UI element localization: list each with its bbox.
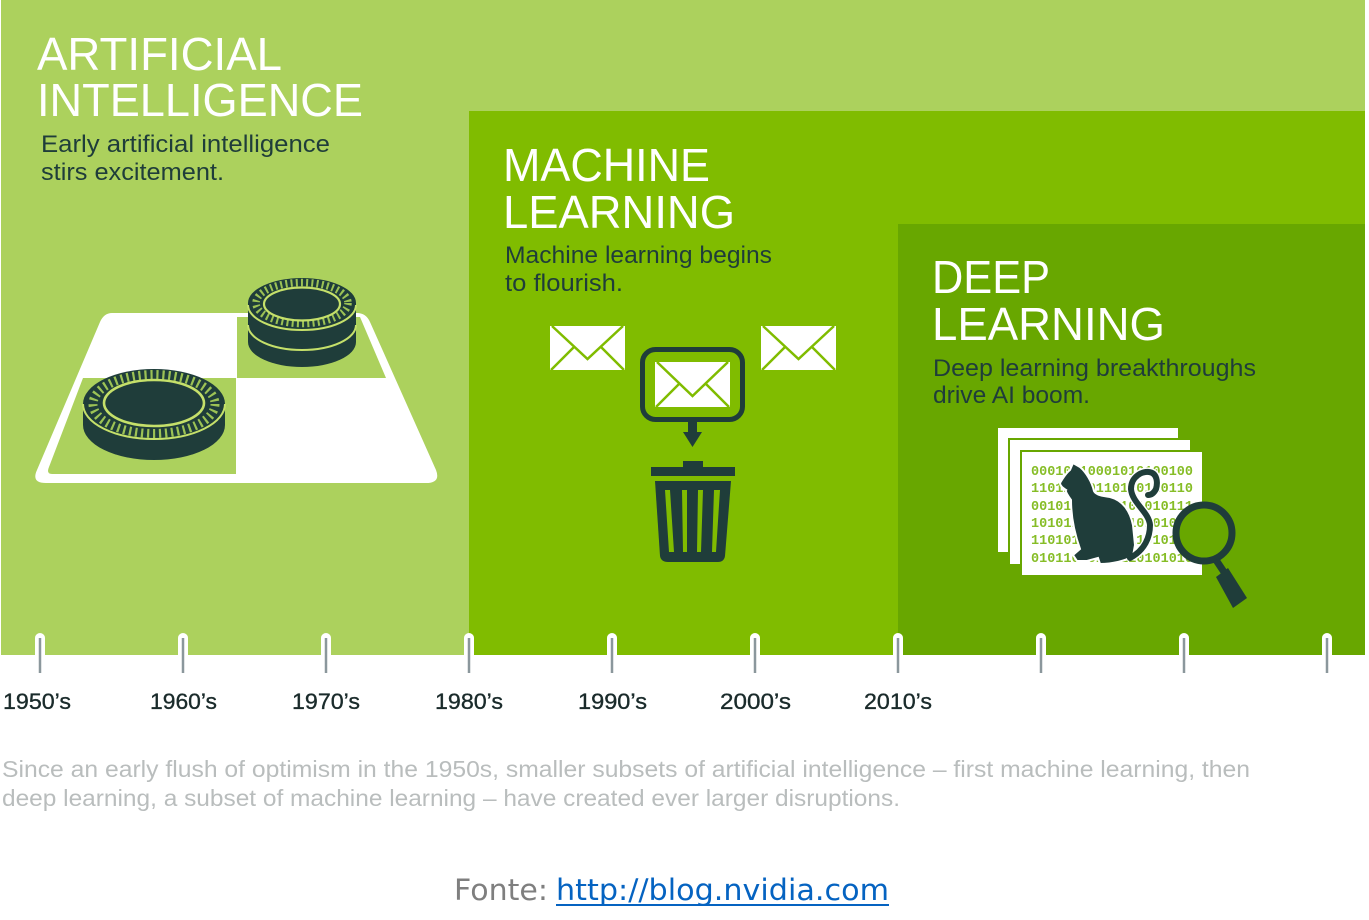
- timeline decade labels: 1980’s: [435, 689, 503, 714]
- icon: cat silhouette: [1060, 463, 1157, 564]
- timeline decade labels: 1970’s: [292, 689, 360, 714]
- text: early artificial intelligence: Early artificial intelligence: [41, 131, 330, 158]
- text: machine learning begins: [505, 242, 772, 297]
- heading: machine learning: LEARNING: [503, 186, 735, 238]
- binary digits: 11011010110100110110: [1031, 481, 1193, 497]
- binary digits: 01011010110110101010: [1031, 551, 1193, 567]
- text: early artificial intelligence: stirs excitement.: [41, 159, 224, 186]
- heading: artificial intelligence: INTELLIGENCE: [37, 74, 363, 126]
- binary digits: 00010110001010100100: [1031, 464, 1193, 480]
- heading: deep learning: DEEP: [932, 251, 1050, 303]
- timeline decade labels: 2010’s: [864, 689, 932, 714]
- icon: trash can: [651, 461, 735, 562]
- icon: left envelope: [550, 326, 625, 370]
- icon: large checker piece: [83, 369, 225, 460]
- icon: filtered envelope in frame: [642, 350, 742, 420]
- caption: deep learning, a subset of machine learning – have created ever larger disruptions.: [2, 785, 900, 811]
- source credit: Fonte:: [454, 873, 548, 907]
- text: machine learning begins: Machine learning begins: [505, 242, 772, 269]
- timeline decade labels: 1990’s: [578, 689, 647, 714]
- heading: deep learning: [932, 251, 1165, 350]
- binary digits: [1031, 464, 1193, 567]
- icon: stacked checker pieces: [248, 278, 356, 367]
- text: deep learning breakthroughs: Deep learning breakthroughs: [933, 355, 1256, 382]
- icon: checkers board: [35, 278, 437, 483]
- timeline decade labels: 1960’s: [150, 689, 217, 714]
- binary digits: 10101101010110101010: [1031, 516, 1193, 532]
- arrow: down to trash: [683, 421, 702, 447]
- text: machine learning begins: to flourish.: [505, 270, 623, 297]
- heading: artificial intelligence: [37, 28, 363, 126]
- panel: deep learning: [898, 224, 1365, 655]
- caption: [2, 756, 1250, 811]
- text: deep learning breakthroughs: [933, 355, 1256, 409]
- heading: machine learning: MACHINE: [503, 139, 710, 191]
- timeline ticks: [35, 633, 1332, 673]
- panel: machine learning: [469, 111, 1365, 655]
- panel: artificial intelligence: [1, 0, 1365, 655]
- binary digits: 00101101100101010111: [1031, 499, 1193, 515]
- heading: machine learning: [503, 139, 735, 238]
- timeline decade labels: 1950’s: [3, 689, 71, 714]
- heading: deep learning: LEARNING: [932, 298, 1165, 350]
- source credit: http://blog.nvidia.com: [556, 873, 889, 907]
- text: deep learning breakthroughs: drive AI boom.: [933, 382, 1090, 409]
- caption: Since an early flush of optimism in the 1950s, smaller subsets of artificial intelligence – first machine learning, then: [2, 756, 1250, 782]
- text: early artificial intelligence: [41, 131, 330, 186]
- binary digits: 11010101101011010110: [1031, 533, 1193, 549]
- icon: right envelope: [761, 326, 836, 370]
- timeline decade labels: 2000’s: [720, 689, 791, 714]
- icon: stacked data pages: [998, 428, 1247, 608]
- timeline decade labels: [3, 689, 932, 714]
- heading: artificial intelligence: ARTIFICIAL: [37, 28, 282, 80]
- icon: magnifying glass: [1176, 505, 1247, 608]
